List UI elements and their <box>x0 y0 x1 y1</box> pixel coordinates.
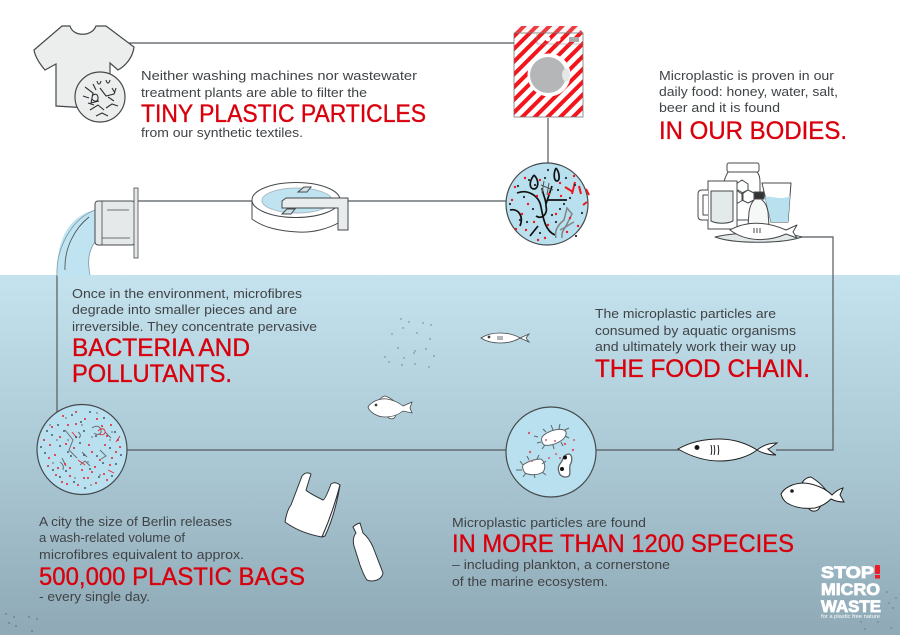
bottom particles <box>5 591 897 632</box>
text: in our bodies: IN OUR BODIES. <box>659 117 847 145</box>
text: the food chain: and ultimately work their way up <box>595 339 796 354</box>
text: the food chain <box>595 306 810 383</box>
icon: plastic bag <box>285 473 340 537</box>
text: the food chain: The microplastic particles are <box>595 306 776 321</box>
text: plastic bags: microfibres equivalent to approx. <box>39 547 244 562</box>
text: bacteria and pollutants: degrade into smaller pieces and are <box>72 302 297 317</box>
icon: t-shirt with fibres <box>34 26 134 122</box>
text: 1200 species: – including plankton, a cornerstone <box>452 557 670 572</box>
text: the food chain: THE FOOD CHAIN. <box>595 355 810 383</box>
logo: stop micro waste: STOP <box>821 564 874 582</box>
sea background <box>0 275 900 635</box>
icon: plastic bottle <box>353 523 383 581</box>
text: bacteria and pollutants: BACTERIA AND <box>72 334 250 362</box>
icon: water treatment basin <box>252 182 348 232</box>
text: bacteria and pollutants <box>72 286 317 388</box>
icon: outflow pipe <box>57 188 138 276</box>
text: bacteria and pollutants: irreversible. They concentrate pervasive <box>72 319 317 334</box>
icon: microfibre circle <box>506 163 589 245</box>
particle cloud <box>384 318 435 368</box>
icon: large fish <box>678 439 777 461</box>
text: 1200 species: IN MORE THAN 1200 SPECIES <box>452 530 794 558</box>
text: plastic bags: - every single day. <box>39 589 150 604</box>
icon: small fish <box>481 333 529 343</box>
text: plastic bags: A city the size of Berlin releases <box>39 514 233 529</box>
logo: stop micro waste <box>821 564 881 620</box>
text: 1200 species: Microplastic particles are found <box>452 515 646 530</box>
text: tiny plastic particles: from our synthetic textiles. <box>141 125 303 140</box>
text: bacteria and pollutants: Once in the environment, microfibres <box>72 286 303 301</box>
text: 1200 species: of the marine ecosystem. <box>452 574 608 589</box>
text: tiny plastic particles: Neither washing machines nor wastewater <box>141 68 418 83</box>
text: bacteria and pollutants: POLLUTANTS. <box>72 360 232 388</box>
text: in our bodies <box>659 68 847 145</box>
icon: plankton circle <box>506 407 596 497</box>
icon: right fish <box>781 477 844 511</box>
icon: medium fish <box>368 396 412 419</box>
text: tiny plastic particles: treatment plants are able to filter the <box>141 85 367 100</box>
logo: stop micro waste: for a plastic free nature <box>821 614 880 620</box>
text: in our bodies: beer and it is found <box>659 100 780 115</box>
text: plastic bags: a wash-related volume of <box>39 530 185 545</box>
icon: particles circle <box>37 404 127 494</box>
text: 1200 species <box>452 515 794 589</box>
text: tiny plastic particles: TINY PLASTIC PARTICLES <box>141 100 426 128</box>
icon: food items <box>698 163 802 242</box>
logo: stop micro waste: MICRO <box>821 581 880 599</box>
icon: washing machine <box>514 26 583 117</box>
logo: stop micro waste: WASTE <box>821 598 881 616</box>
text: plastic bags <box>39 514 305 604</box>
text: the food chain: consumed by aquatic organisms <box>595 323 797 338</box>
connector lines <box>57 43 833 450</box>
text: in our bodies: Microplastic is proven in our <box>659 68 835 83</box>
text: in our bodies: daily food: honey, water, salt, <box>659 84 838 99</box>
text: plastic bags: 500,000 PLASTIC BAGS <box>39 563 305 591</box>
text: tiny plastic particles <box>141 68 426 140</box>
